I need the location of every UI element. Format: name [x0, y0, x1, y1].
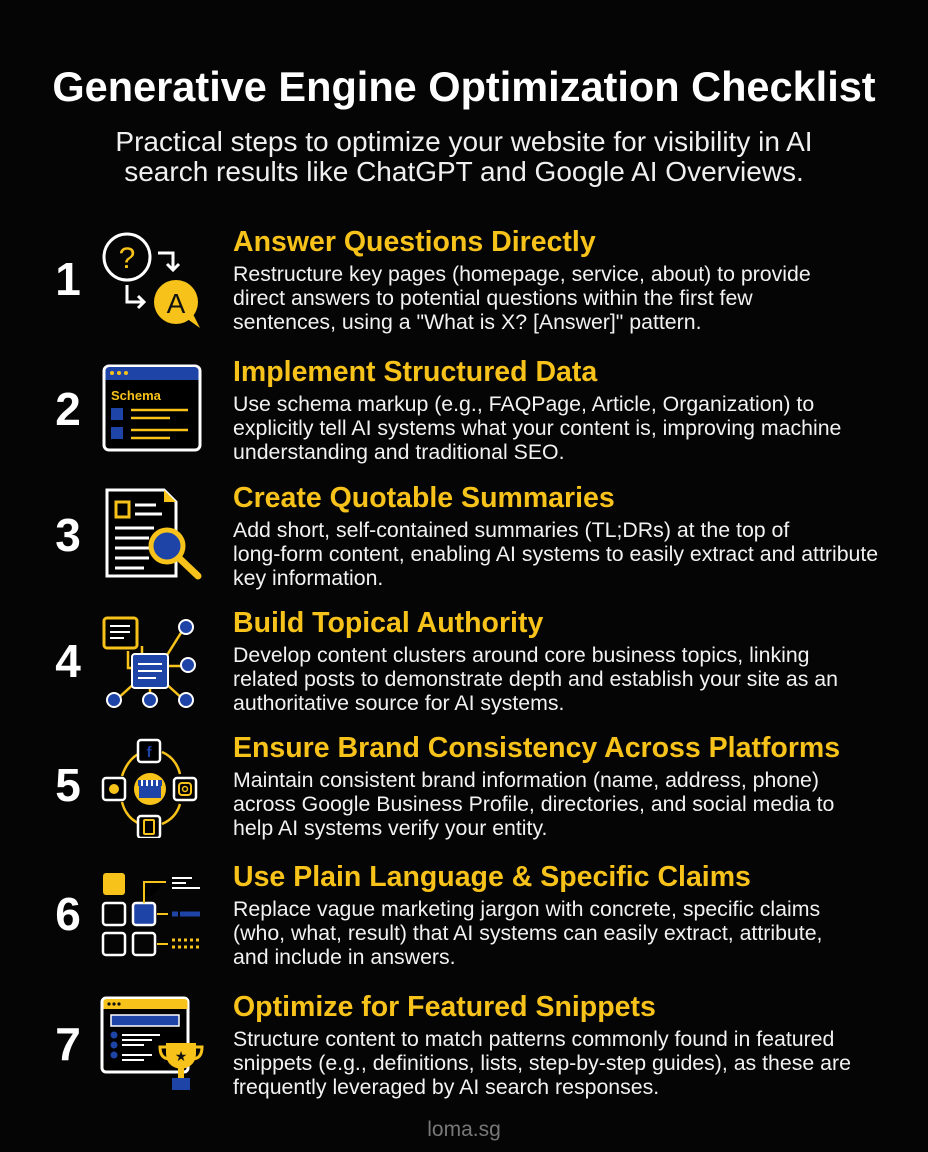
subtitle: search results like ChatGPT and Google AI Overviews. [124, 156, 804, 187]
item 5 text [233, 732, 840, 840]
subtitle: Practical steps to optimize your website for visibility in AI [115, 126, 813, 157]
subtitle [115, 126, 813, 187]
item 6 text: Use Plain Language & Specific Claims [233, 861, 751, 893]
icon: question answer [102, 232, 200, 328]
item 5 text: across Google Business Profile, directories, and social media to [233, 792, 834, 816]
number 6: 6 [55, 888, 81, 940]
item 7 text [233, 991, 851, 1099]
item 5 text: help AI systems verify your entity. [233, 816, 547, 840]
item 2 text [233, 356, 841, 464]
icon: brand platforms [102, 738, 198, 838]
icon: featured snippet trophy [100, 996, 204, 1090]
item 2 text: Use schema markup (e.g., FAQPage, Article, Organization) to [233, 392, 814, 416]
item 7 text: snippets (e.g., definitions, lists, step-by-step guides), as these are [233, 1051, 851, 1075]
icon: brand platforms: f [146, 744, 152, 761]
item 1 text: direct answers to potential questions within the first few [233, 286, 753, 310]
item 2 text: explicitly tell AI systems what your content is, improving machine [233, 416, 841, 440]
item 3 text: Create Quotable Summaries [233, 482, 615, 514]
item 7 text: frequently leveraged by AI search responses. [233, 1075, 659, 1099]
number 5: 5 [55, 759, 81, 811]
number 3: 3 [55, 509, 81, 561]
number 7: 7 [55, 1018, 81, 1070]
item 4 text: Develop content clusters around core business topics, linking [233, 643, 810, 667]
item 5 text: Maintain consistent brand information (name, address, phone) [233, 768, 819, 792]
item 3 text: long-form content, enabling AI systems to easily extract and attribute [233, 542, 878, 566]
item 6 text: and include in answers. [233, 945, 456, 969]
item 1 text: Answer Questions Directly [233, 226, 596, 258]
item 1 text: sentences, using a "What is X? [Answer]" pattern. [233, 310, 702, 334]
item 5 text: Ensure Brand Consistency Across Platforms [233, 732, 840, 764]
icon: question answer: A [167, 288, 186, 319]
item 6 text: Replace vague marketing jargon with concrete, specific claims [233, 897, 820, 921]
item 7 text: Optimize for Featured Snippets [233, 991, 656, 1023]
item 7 text: Structure content to match patterns commonly found in featured [233, 1027, 834, 1051]
icon: schema window [102, 364, 202, 452]
item 6 text: (who, what, result) that AI systems can easily extract, attribute, [233, 921, 822, 945]
number 2: 2 [55, 383, 81, 435]
item 3 text: Add short, self-contained summaries (TL;DRs) at the top of [233, 518, 789, 542]
icon: document magnifier [106, 488, 202, 580]
icon: schema window: Schema [111, 388, 162, 403]
footer: loma.sg [427, 1118, 501, 1141]
number 1: 1 [55, 253, 81, 305]
title: Generative Engine Optimization Checklist [52, 63, 876, 110]
number 4: 4 [55, 635, 81, 687]
item 4 text: authoritative source for AI systems. [233, 691, 564, 715]
item 4 text: Build Topical Authority [233, 607, 543, 639]
item 1 text: Restructure key pages (homepage, service, about) to provide [233, 262, 811, 286]
item 4 text [233, 607, 838, 715]
icon: plain language grid [102, 873, 200, 956]
icon: topic network [102, 616, 196, 708]
item 1 text [233, 226, 811, 334]
icon: question answer: ? [119, 242, 135, 275]
icon: featured snippet trophy: ★ [175, 1048, 187, 1064]
item 2 text: understanding and traditional SEO. [233, 440, 565, 464]
item 3 text [233, 482, 878, 590]
item 2 text: Implement Structured Data [233, 356, 597, 388]
item 6 text [233, 861, 822, 969]
item 3 text: key information. [233, 566, 383, 590]
item 4 text: related posts to demonstrate depth and establish your site as an [233, 667, 838, 691]
